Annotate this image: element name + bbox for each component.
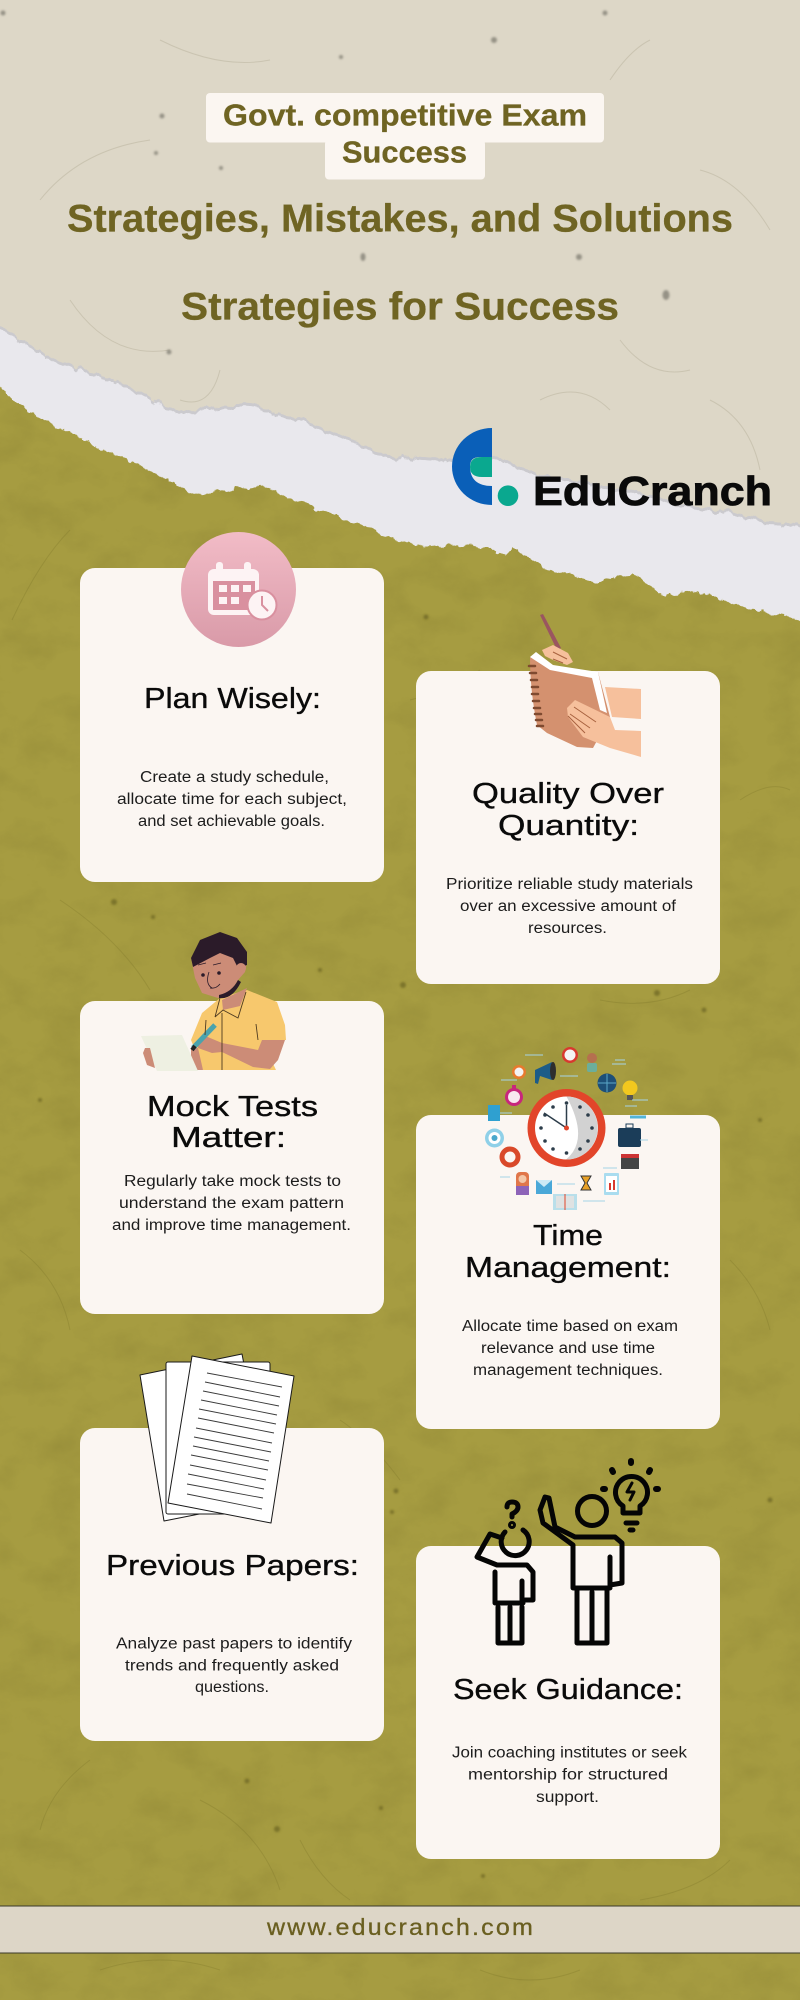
text: Mock Tests body: and improve time management. — [112, 1217, 351, 1234]
logo: EduCranch: EduCranch — [533, 468, 772, 514]
torn white paper band — [0, 300, 800, 622]
torn paper shadow — [0, 0, 800, 526]
heading: Quality Over Quantity — [472, 778, 664, 842]
title — [206, 93, 604, 180]
icon: logo mark — [452, 428, 518, 506]
text: Quality Over Quantity body — [446, 876, 693, 937]
text: Previous Papers body — [116, 1636, 352, 1696]
heading: Time Management: Time — [533, 1220, 603, 1252]
icon: notebook with hands — [529, 614, 641, 757]
panel: Seek Guidance — [416, 1461, 720, 1859]
subtitle: Strategies, Mistakes, and Solutions — [67, 198, 733, 240]
icon: stack of papers — [140, 1354, 294, 1523]
icon: boy writing on paper — [141, 932, 286, 1071]
heading: Time Management — [465, 1220, 671, 1284]
text: Previous Papers body: questions. — [195, 1679, 269, 1696]
panel: Mock Tests Matter — [80, 932, 384, 1314]
beige paper top section — [0, 0, 800, 523]
heading: Quality Over Quantity: Quality Over — [472, 778, 664, 810]
title: Govt. competitive Exam — [223, 98, 587, 132]
text: Plan Wisely body: Create a study schedule, — [140, 769, 329, 786]
text: Mock Tests body: understand the exam pattern — [119, 1195, 344, 1212]
text: Mock Tests body: Regularly take mock tests to — [124, 1173, 341, 1190]
panel: Time Management — [416, 1047, 720, 1429]
text: Quality Over Quantity body: over an excessive amount of — [460, 898, 677, 915]
text: Time Management body: management techniques. — [473, 1362, 663, 1379]
heading: Previous Papers: Previous Papers: — [106, 1550, 359, 1582]
text: Time Management body: Allocate time based on exam — [462, 1318, 678, 1335]
text: Plan Wisely body — [117, 769, 347, 830]
text: Plan Wisely body: and set achievable goals. — [138, 813, 325, 830]
text: Mock Tests body — [112, 1173, 351, 1234]
heading: Quality Over Quantity: Quantity: — [498, 810, 639, 842]
footer url: www.educranch.com — [266, 1914, 535, 1940]
text: Time Management body: relevance and use time — [481, 1340, 655, 1357]
text: Quality Over Quantity body: resources. — [528, 920, 607, 937]
title: Success — [342, 134, 467, 170]
text: Seek Guidance body: mentorship for structured — [468, 1766, 668, 1784]
logo: EduCranch — [452, 428, 772, 514]
heading: Mock Tests Matter: Matter: — [171, 1122, 286, 1154]
section heading: Strategies for Success — [181, 286, 619, 328]
icon: two figures with question mark and light bulb — [477, 1461, 658, 1643]
icon: clock with surrounding icons — [485, 1047, 648, 1210]
heading: Plan Wisely: Plan Wisely: — [144, 683, 321, 715]
icon: pink calendar clock badge — [181, 532, 296, 647]
text: Time Management body — [462, 1318, 678, 1379]
title highlight boxes — [206, 93, 604, 180]
text: Seek Guidance body — [452, 1744, 687, 1806]
footer band — [0, 1906, 800, 1953]
heading: Mock Tests Matter — [147, 1091, 318, 1154]
text: Seek Guidance body: Join coaching institutes or seek — [452, 1744, 687, 1762]
panel: Plan Wisely — [80, 532, 384, 882]
heading: Time Management: Management: — [465, 1252, 671, 1284]
panel: Quality Over Quantity — [416, 614, 720, 984]
text: Previous Papers body: trends and frequently asked — [125, 1658, 339, 1674]
panel: Previous Papers — [80, 1354, 384, 1741]
heading: Seek Guidance: Seek Guidance: — [453, 1674, 683, 1706]
text: Seek Guidance body: support. — [536, 1789, 599, 1806]
text: Previous Papers body: Analyze past papers to identify — [116, 1636, 352, 1652]
text: Plan Wisely body: allocate time for each subject, — [117, 791, 347, 808]
heading: Mock Tests Matter: Mock Tests — [147, 1091, 318, 1123]
text: Quality Over Quantity body: Prioritize reliable study materials — [446, 876, 693, 893]
